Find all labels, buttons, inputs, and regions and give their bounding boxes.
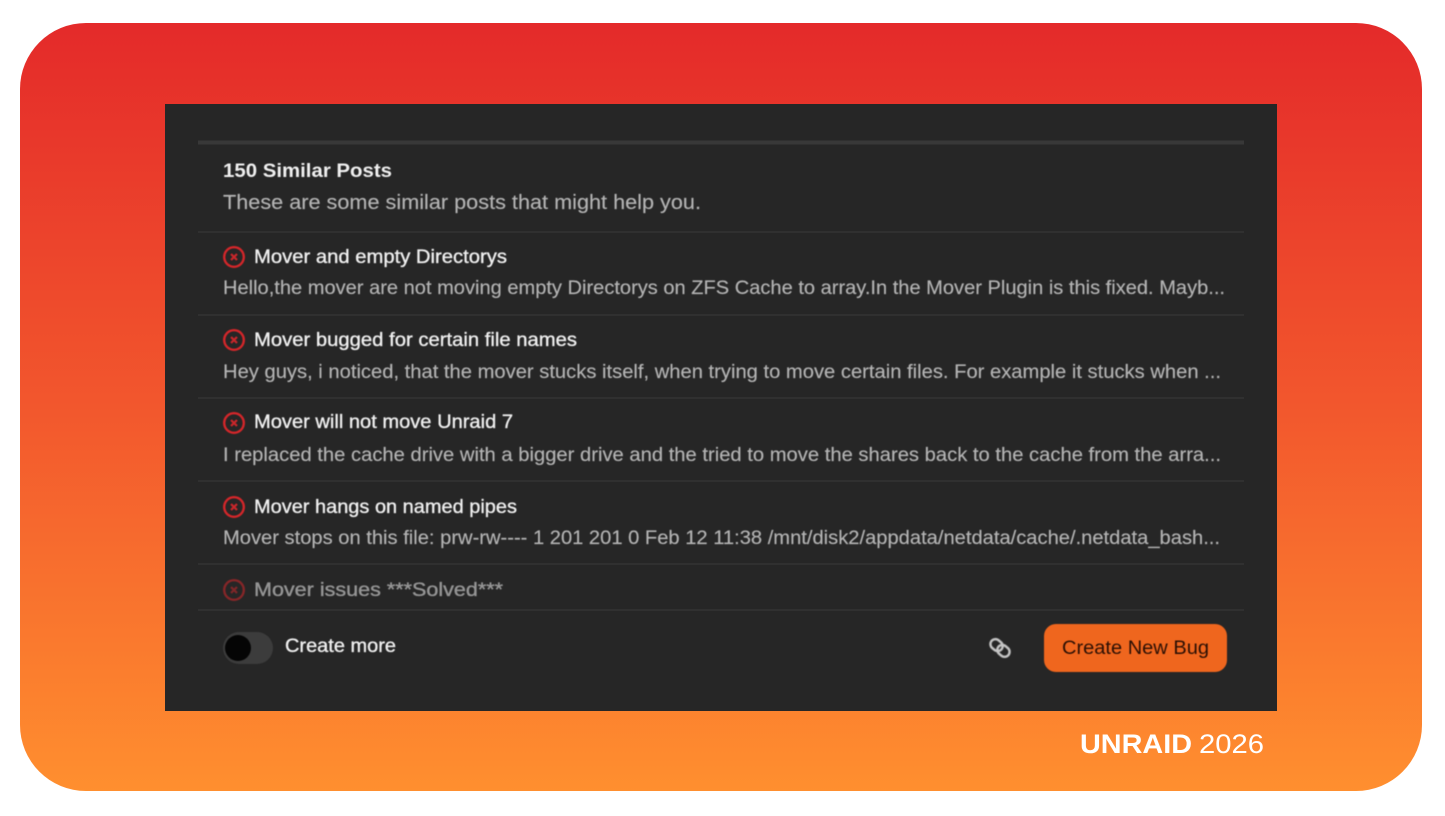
toggle: create more [223, 632, 396, 664]
post 3 [223, 411, 1221, 466]
post 5 faded: Mover issues ***Solved*** [254, 579, 503, 601]
post 3: I replaced the cache drive with a bigger drive and the tried to move the shares back to the cache from the arra... [223, 445, 1221, 466]
panel: similar posts dialog [165, 104, 1277, 711]
post 4: Mover hangs on named pipes [254, 496, 517, 518]
post 2: Mover bugged for certain file names [254, 329, 577, 351]
logo: Unraid 2026 [1080, 729, 1264, 759]
post 1: Hello,the mover are not moving empty Directorys on ZFS Cache to array.In the Mover Plugin is this fixed. Mayb... [223, 278, 1225, 299]
post 3: Mover will not move Unraid 7 [254, 411, 513, 433]
post 2 [223, 329, 1221, 383]
post 2: Hey guys, i noticed, that the mover stucks itself, when trying to move certain files. For example it stucks when ... [223, 362, 1221, 383]
post 1 [223, 246, 1225, 299]
icon: link [988, 637, 1012, 659]
heading [223, 161, 701, 214]
logo: Unraid 2026: 2026 [1199, 729, 1264, 759]
post 4 [223, 496, 1220, 549]
button: create new bug [1044, 624, 1227, 672]
subheading: These are some similar posts that might help you. [223, 192, 701, 214]
button: create new bug: Create New Bug [1062, 638, 1209, 659]
toggle: create more: Create more [285, 635, 396, 657]
logo: Unraid 2026: UNRAID [1080, 729, 1192, 759]
post 4: Mover stops on this file: prw-rw---- 1 201 201 0 Feb 12 11:38 /mnt/disk2/appdata/netdata/cache/.netdata_bash... [223, 528, 1220, 549]
heading: 150 Similar Posts [223, 161, 392, 182]
post 1: Mover and empty Directorys [254, 246, 507, 268]
